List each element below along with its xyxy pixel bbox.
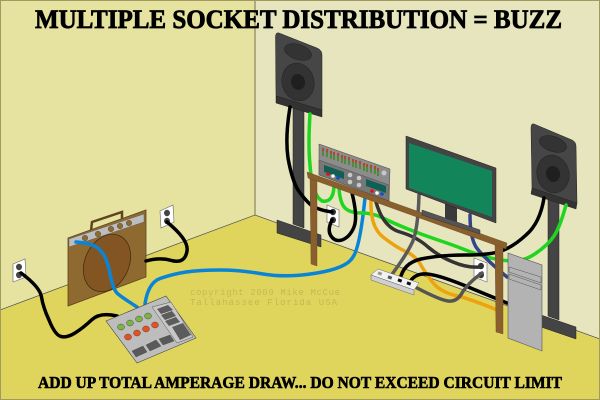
flat screen monitor xyxy=(406,136,496,234)
cable: black amp to upper socket xyxy=(146,222,187,261)
cable: black power strip to tower xyxy=(409,274,507,303)
wooden desk xyxy=(307,172,507,334)
cable: black left speaker to socket xyxy=(287,107,332,212)
cables xyxy=(21,107,566,337)
icon: wall socket right xyxy=(474,258,487,282)
cable: black rack to middle socket xyxy=(329,193,356,240)
copyright notice: copyright 2009 Mike McCue xyxy=(190,288,340,298)
rack mixer unit xyxy=(319,144,390,201)
foot switches xyxy=(132,335,174,357)
cable: green left speaker to rack xyxy=(309,114,334,201)
cable: dark gray rack to right socket xyxy=(376,202,480,267)
copyright notice: Tallahassee Florida USA xyxy=(190,298,338,308)
effect panel xyxy=(152,302,193,343)
left speaker on stand xyxy=(276,33,322,247)
power strip xyxy=(371,269,419,295)
icon: wall socket upper left xyxy=(160,205,174,228)
cable: gray monitor to power strip xyxy=(390,195,419,277)
cable: gray power strip to right socket xyxy=(417,273,482,301)
footer message: ADD UP TOTAL AMPERAGE DRAW... DO NOT EXCEED CIRCUIT LIMIT xyxy=(38,373,563,392)
icon: wall socket left xyxy=(13,259,26,282)
cable: navy monitor to tower xyxy=(470,215,507,277)
cable: blue amp to pedalboard xyxy=(76,242,137,307)
green LEDs xyxy=(118,313,152,330)
guitar amplifier xyxy=(68,210,146,306)
icon: wall socket middle xyxy=(327,205,339,227)
guitar pedalboard xyxy=(106,296,196,363)
cable: blue pedalboard to rack xyxy=(145,198,365,304)
copyright notice xyxy=(190,288,340,308)
cable: black power strip to right speaker xyxy=(400,198,544,280)
computer tower xyxy=(508,253,542,351)
cable: black left socket to pedalboard xyxy=(21,273,117,337)
cable: orange rack to tower xyxy=(371,200,497,310)
title: MULTIPLE SOCKET DISTRIBUTION = BUZZ xyxy=(35,5,562,34)
red LEDs xyxy=(124,322,158,340)
cable: green rack to right speaker xyxy=(339,188,566,261)
right speaker on stand xyxy=(531,124,577,339)
